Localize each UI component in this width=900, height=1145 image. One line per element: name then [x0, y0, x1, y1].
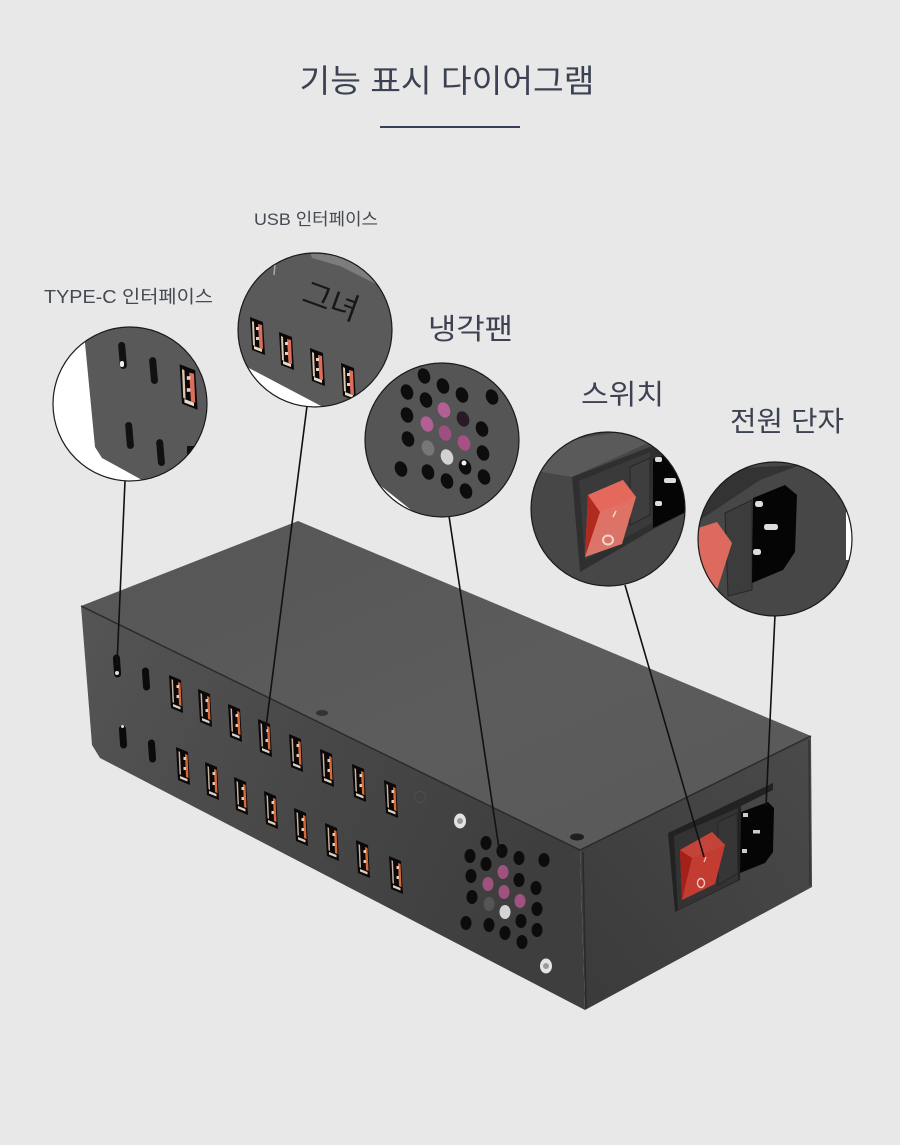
power socket: [740, 802, 774, 873]
USB ports upper row: [169, 675, 398, 818]
leader lines: [117, 406, 775, 857]
socket: [752, 485, 797, 583]
label: TYPE-C interface: TYPE-C 인터페이스: [44, 287, 213, 307]
device side face: [580, 736, 812, 1010]
rocker fragment: [698, 522, 732, 590]
rocker switch: [680, 832, 725, 900]
rocker: [585, 480, 636, 557]
label: USB interface: USB 인터페이스: [254, 210, 378, 229]
engraved logo: 그녀: [298, 275, 364, 328]
power switch and socket module: [668, 783, 774, 912]
screws: [316, 710, 584, 974]
device: USB charging hub: [81, 521, 812, 1010]
callout circle: USB ports: [237, 252, 393, 408]
callout circle: type-C ports: [52, 326, 208, 482]
callout circle: power terminal: [698, 462, 856, 616]
type-C ports on device: [113, 654, 156, 763]
title: 기능 표시 다이어그램: [300, 63, 594, 99]
label: power terminal: 전원 단자: [730, 406, 844, 437]
device front face: [81, 606, 585, 1010]
cooling vent holes: [460, 836, 550, 949]
label: cooling fan: 냉각팬: [428, 314, 513, 346]
callout circle: switch: [530, 432, 690, 586]
callout circle: cooling fan vents: [364, 362, 520, 518]
socket: [653, 456, 684, 528]
device top face: [81, 521, 811, 850]
USB ports lower row: [176, 747, 403, 894]
label: switch: 스위치: [581, 379, 664, 410]
